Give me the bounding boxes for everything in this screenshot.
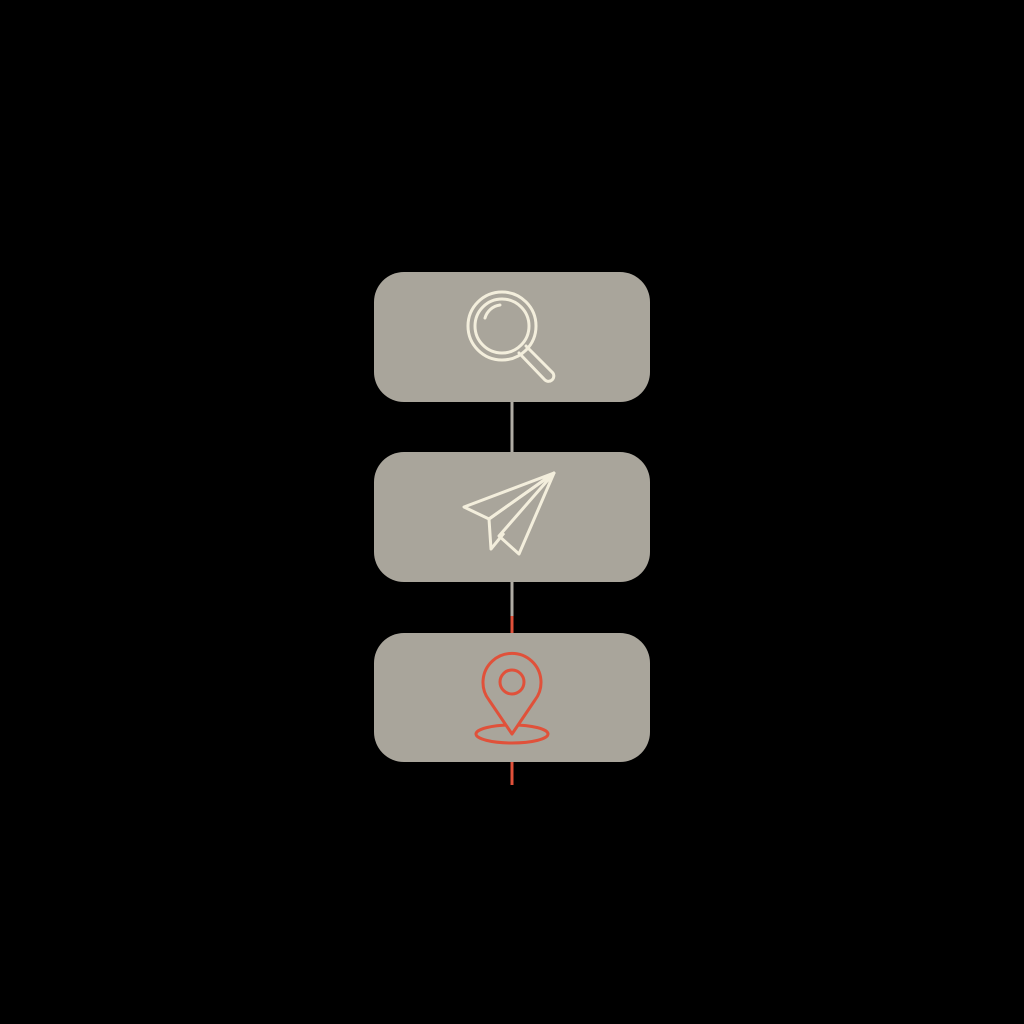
icon: magnifying glass — [468, 292, 554, 381]
icon: paper plane — [464, 473, 554, 554]
panel: send — [374, 452, 650, 582]
connector lines — [510, 400, 514, 785]
icon: map pin — [476, 653, 548, 743]
panel: search — [374, 272, 650, 402]
panel: location — [374, 633, 650, 762]
